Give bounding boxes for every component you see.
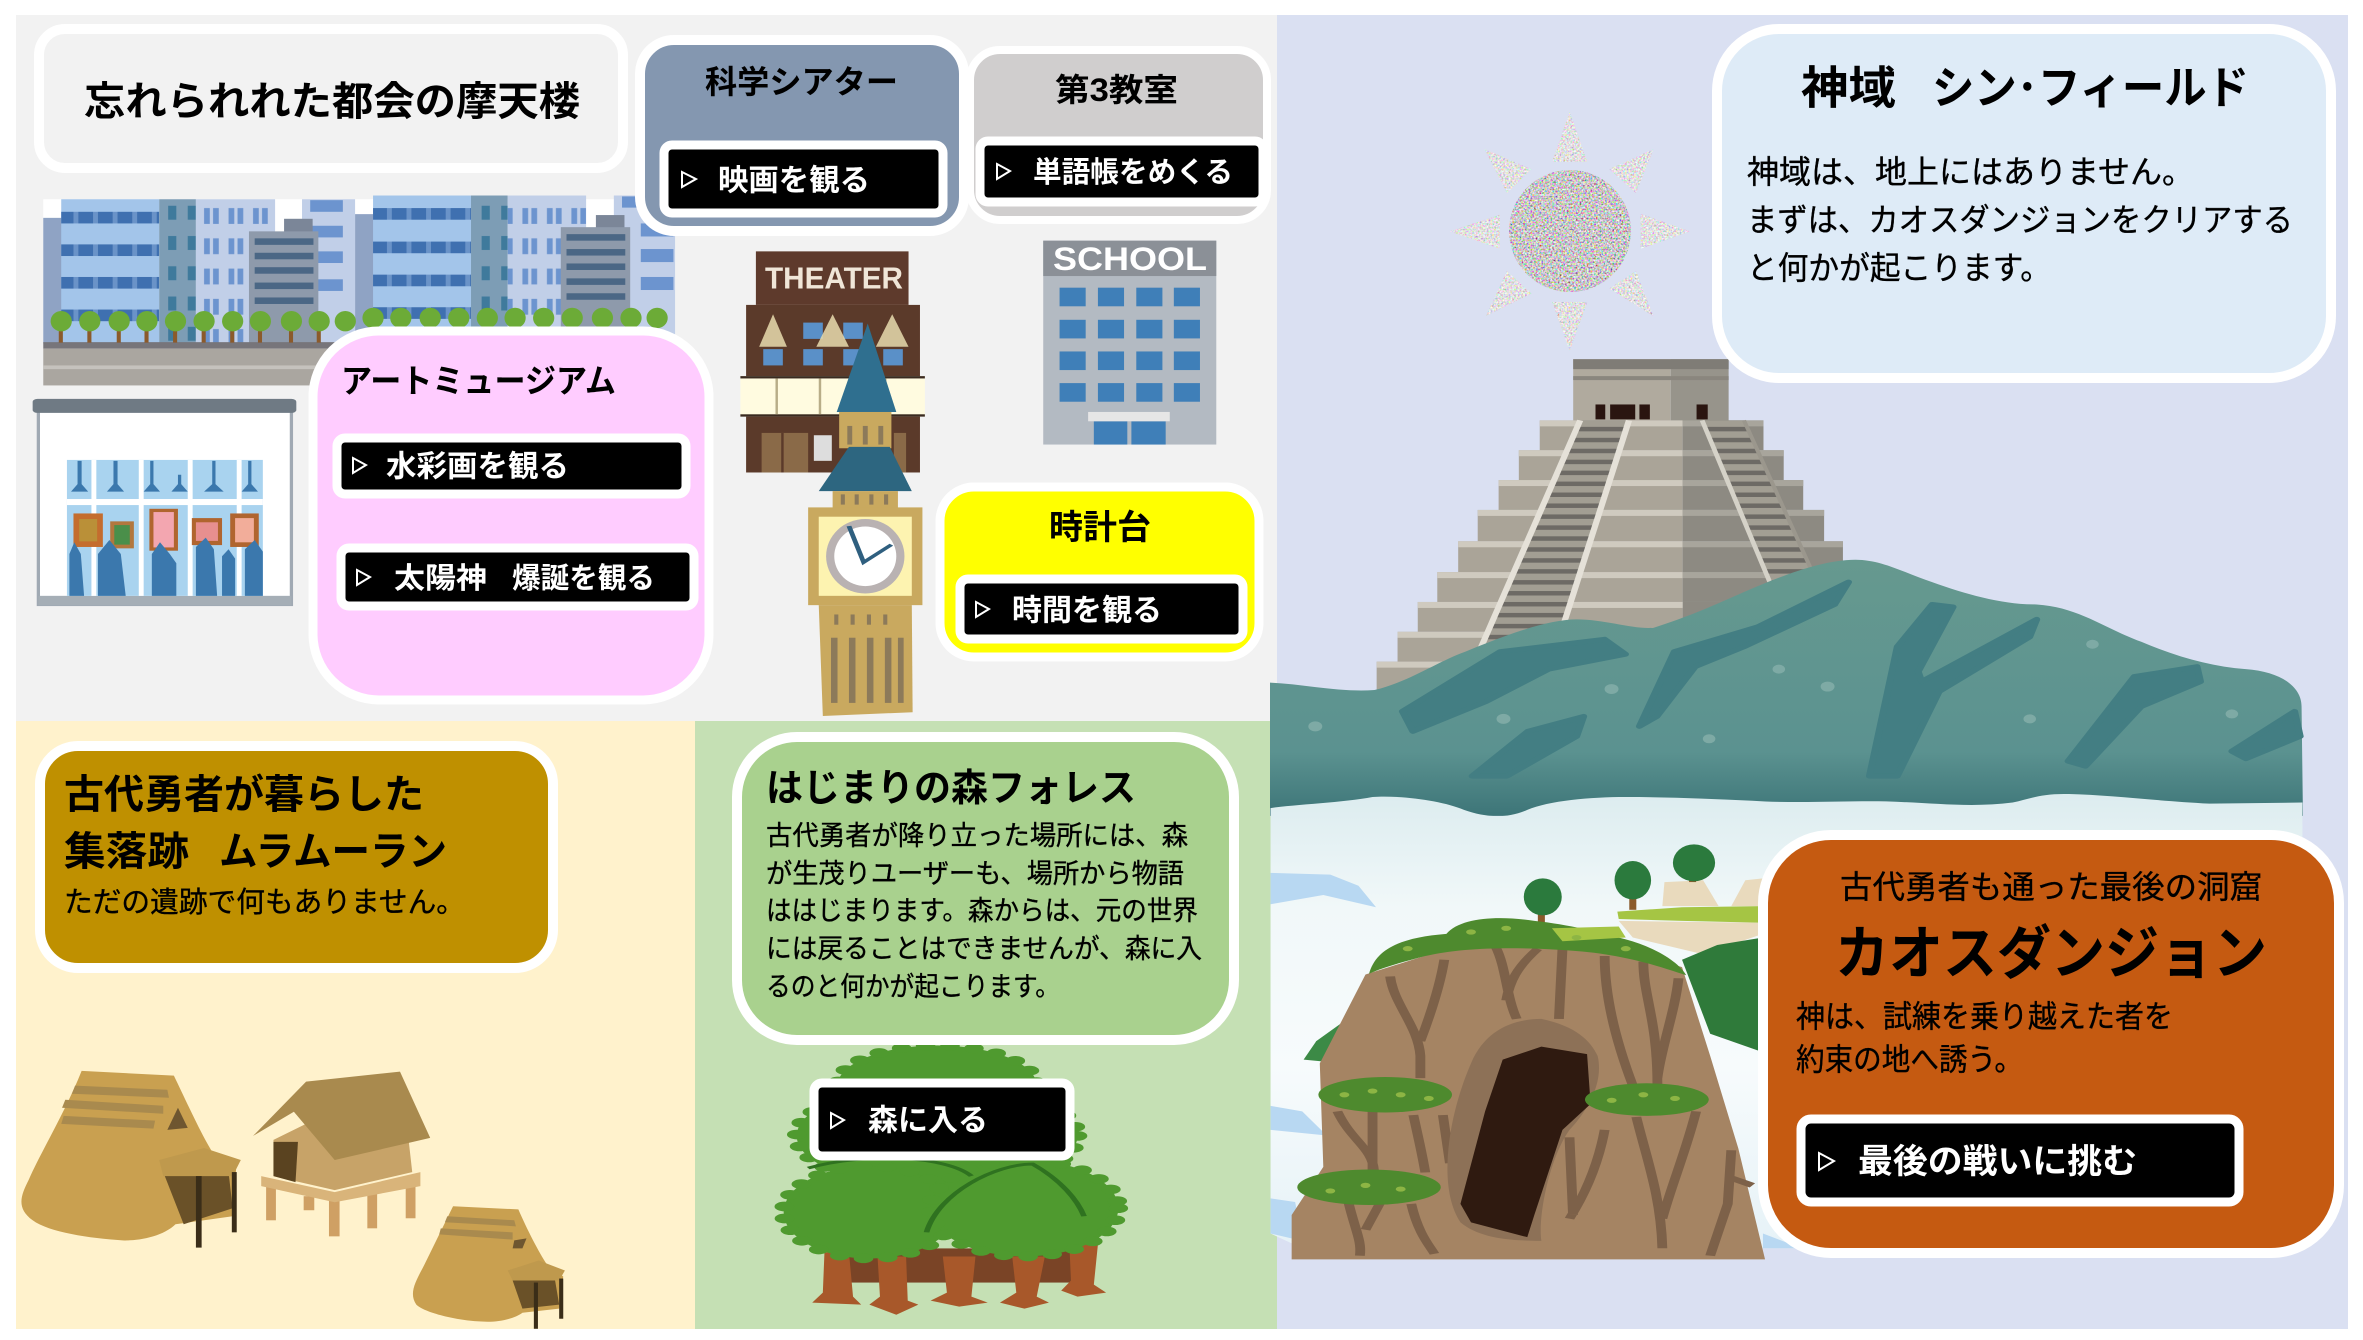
heading: village ruins: ムラムーラン xyxy=(219,830,447,874)
button: watch movie xyxy=(664,145,943,213)
text: ruins description: ただの遺跡で何もありません。 xyxy=(64,886,465,919)
text: Shin Field description xyxy=(1747,154,2293,286)
button: watch watercolors xyxy=(337,438,686,494)
text: forest description: るのと何かが起こります。 xyxy=(766,972,1060,1002)
button: enter forest xyxy=(814,1083,1070,1156)
heading: Shin Field: 神域 xyxy=(1801,62,1896,114)
illustration: city skyline xyxy=(43,196,675,385)
heading: village ruins: 古代勇者が暮らした xyxy=(64,773,424,817)
button: watch time xyxy=(960,579,1243,639)
heading: village ruins: 集落跡 xyxy=(64,830,189,874)
panel: village ruins xyxy=(40,746,553,968)
panel: city title xyxy=(39,29,623,168)
panel: art museum xyxy=(313,331,709,700)
heading: beginning forest: はじまりの森フォレス xyxy=(766,768,1136,810)
text: forest description: ははじまります。森からは、元の世界 xyxy=(766,896,1198,926)
panel: sacred area background xyxy=(1277,15,2348,1329)
text: dungeon description xyxy=(1796,1000,2173,1078)
heading: science theater: 科学シアター xyxy=(705,64,898,100)
text: forest description: 古代勇者が降り立った場所には、森 xyxy=(766,821,1188,851)
button: flip vocabulary book: 単語帳をめくる xyxy=(1033,156,1233,189)
illustration: theater building: THEATER xyxy=(765,260,903,296)
heading: Shin Field xyxy=(1801,62,2249,114)
button: watch birth of sun god: 太陽神 xyxy=(394,562,487,595)
illustration: art museum building xyxy=(33,399,296,605)
button: watch birth of sun god xyxy=(341,548,694,606)
panel: chaos dungeon xyxy=(1763,835,2339,1253)
text: Shin Field description: 神域は、地上にはありません。 xyxy=(1747,154,2194,190)
button: take on the last battle xyxy=(1801,1119,2239,1202)
illustration: stepped pyramid xyxy=(1377,359,1883,696)
panel: ruins background xyxy=(16,721,695,1329)
panel: classroom 3 xyxy=(970,50,1267,220)
illustration: teal mountain xyxy=(1270,560,2303,816)
panel: clock tower xyxy=(940,487,1259,657)
heading: art museum: アートミュージアム xyxy=(341,362,616,400)
panel: forest background xyxy=(695,721,1280,1329)
text: forest description: には戻ることはできませんが、森に入 xyxy=(766,934,1202,964)
text: Shin Field description: まずは、カオスダンジョンをクリアする xyxy=(1747,202,2293,238)
text: dungeon description: 約束の地へ誘う。 xyxy=(1796,1042,2023,1078)
text: Shin Field description: と何かが起こります。 xyxy=(1747,250,2051,286)
button: watch time: 時間を観る xyxy=(1012,594,1162,628)
panel: city background xyxy=(16,15,1278,722)
heading: Shin Field: シン･フィールド xyxy=(1932,62,2249,114)
illustration: noisy sun xyxy=(1450,112,1689,350)
illustration: school building: SCHOOL xyxy=(1053,241,1207,277)
heading: chaos dungeon: カオスダンジョン xyxy=(1835,922,2267,986)
text: dungeon description: 神は、試練を乗り越えた者を xyxy=(1796,1000,2173,1034)
button: enter forest: 森に入る xyxy=(868,1104,988,1138)
heading: city name: 忘れられれた都会の摩天楼 xyxy=(84,80,580,124)
heading: clock tower: 時計台 xyxy=(1049,509,1151,547)
panel: science theater xyxy=(640,40,964,231)
button: flip vocabulary book xyxy=(980,141,1263,202)
button: watch movie: 映画を観る xyxy=(718,164,870,198)
button: take on the last battle: 最後の戦いに挑む xyxy=(1858,1143,2137,1181)
illustration: school building xyxy=(1043,241,1216,445)
illustration: theater building xyxy=(740,251,925,472)
text: forest description: が生茂りユーザーも、場所から物語 xyxy=(766,859,1184,889)
illustration: clock tower xyxy=(808,324,922,716)
text: forest description xyxy=(766,821,1202,1002)
text: dungeon subtitle: 古代勇者も通った最後の洞窟 xyxy=(1840,869,2262,905)
heading: village ruins xyxy=(64,773,447,874)
panel: beginning forest xyxy=(737,737,1234,1040)
illustration: thatched huts xyxy=(21,1071,565,1329)
heading: classroom 3: 第3教室 xyxy=(1055,72,1178,108)
button: watch watercolors: 水彩画を観る xyxy=(386,450,569,484)
button: watch birth of sun god: 爆誕を観る xyxy=(512,562,655,595)
illustration: cave cliff xyxy=(1292,918,1765,1259)
illustration: sea of clouds xyxy=(1271,794,2302,1248)
illustration: forest tree xyxy=(784,1046,1118,1315)
panel: sacred area Shin Field xyxy=(1717,29,2331,378)
